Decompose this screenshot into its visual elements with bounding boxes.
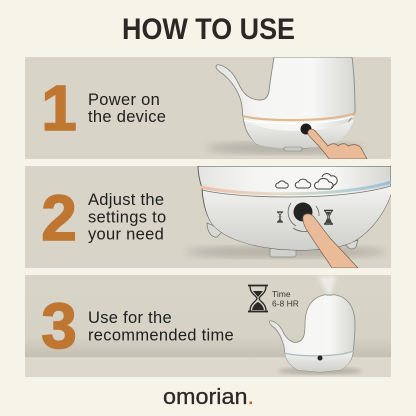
panel: step 2: [25, 166, 391, 268]
step 3 humidifier illustration: [269, 276, 362, 374]
power button: [300, 124, 312, 134]
finger pressing: [303, 214, 358, 268]
step 2 number: 2: [41, 182, 77, 254]
mist: [318, 276, 336, 295]
step 1 humidifier illustration: [207, 57, 367, 159]
step 2 text: Adjust the: [88, 191, 164, 209]
logo: omorian.: [163, 384, 254, 409]
hand pressing: [308, 129, 367, 159]
time label: Time: [272, 289, 291, 299]
dial button: [294, 202, 312, 222]
step 1 text: the device: [88, 108, 166, 126]
panel: step 1: [25, 57, 391, 159]
panel: step 3: [25, 275, 391, 377]
step 2 text: your need: [88, 226, 164, 244]
step 3 text: recommended time: [88, 326, 234, 344]
step 1 number: 1: [41, 72, 77, 144]
step 2 text: settings to: [88, 208, 167, 226]
step 2 humidifier illustration: [185, 166, 391, 268]
dial rings: [288, 203, 296, 226]
title: HOW TO USE: [122, 13, 295, 46]
step 3 text: Use for the: [88, 309, 172, 327]
large hourglass: [324, 210, 333, 224]
cloud icons: [276, 174, 337, 189]
hourglass icon: [248, 286, 268, 312]
step 3 number: 3: [41, 290, 77, 362]
step 1 text: Power on: [88, 91, 160, 109]
button: [318, 356, 322, 360]
time label: 6-8 HR: [272, 298, 299, 308]
small hourglass: [277, 212, 283, 222]
